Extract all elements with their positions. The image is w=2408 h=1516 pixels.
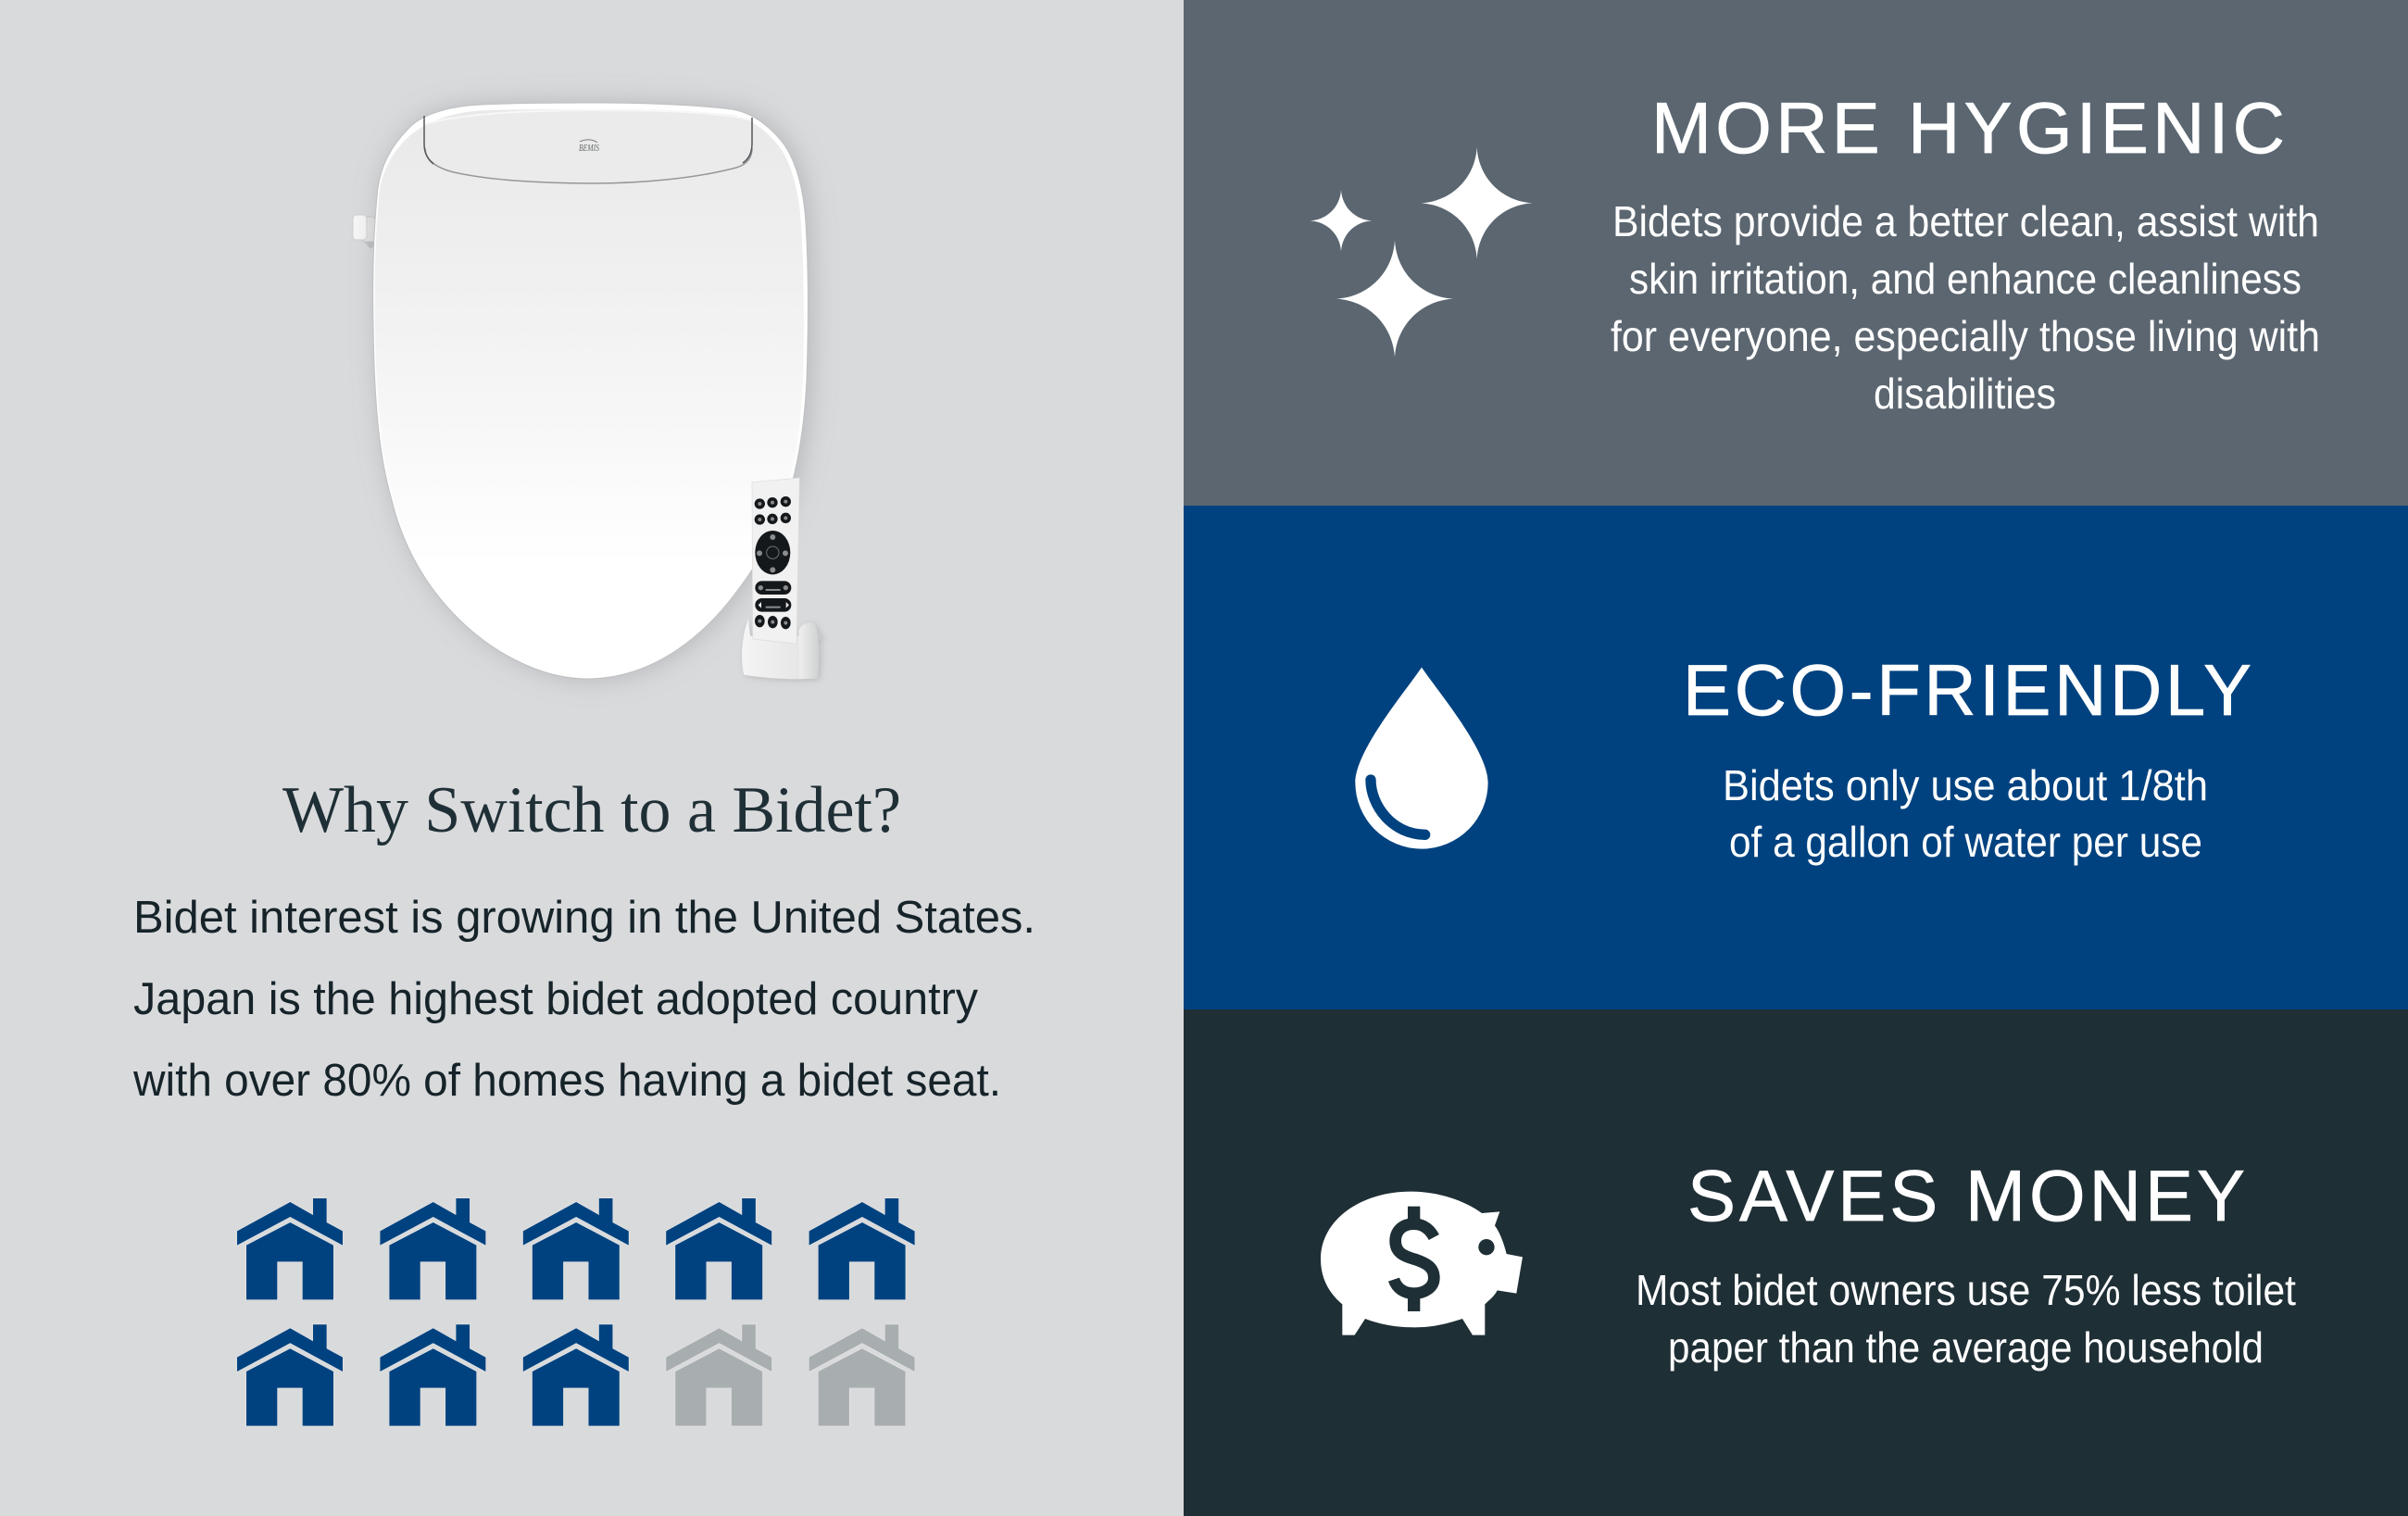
- seat lid: [424, 110, 752, 183]
- brand mark: BEMIS: [579, 144, 599, 154]
- remote buttons: [755, 496, 791, 629]
- heading: saves money: SAVES MONEY: [1687, 1155, 2245, 1236]
- text: hygienic description: Bidets provide a better clean, assist with: [1612, 197, 2319, 245]
- panel: more hygienic: [1184, 0, 2408, 506]
- text: hygienic description: skin irritation, and enhance cleanliness: [1629, 255, 2301, 303]
- heading: why switch: Why Switch to a Bidet?: [282, 774, 901, 846]
- seat surface: [375, 109, 804, 678]
- panel: eco-friendly: [1184, 506, 2408, 1009]
- icon: piggy bank: [1321, 1192, 1523, 1335]
- text block: bidet interest: with over 80% of homes having a bidet seat.: [132, 1056, 1001, 1106]
- text block: bidet interest: [132, 893, 1035, 1106]
- icon: sparkles: [1311, 147, 1533, 357]
- text: saves money description: [1636, 1266, 2296, 1372]
- panel: saves money: [1184, 1009, 2408, 1516]
- heading: more hygienic: MORE HYGIENIC: [1651, 87, 2285, 169]
- text block: bidet interest: Bidet interest is growing in the United States.: [133, 893, 1035, 943]
- image: remote control in cradle: [742, 478, 821, 679]
- text: saves money description: Most bidet owners use 75% less toilet: [1636, 1266, 2296, 1314]
- cradle: [742, 619, 821, 679]
- text: eco description: of a gallon of water per use: [1729, 818, 2202, 866]
- icon: water drop: [1355, 668, 1488, 849]
- house row 1: [237, 1198, 915, 1299]
- house row 2 grey: [666, 1324, 915, 1426]
- remote body: [752, 478, 799, 644]
- heading: eco-friendly: ECO-FRIENDLY: [1683, 649, 2251, 731]
- text block: bidet interest: Japan is the highest bidet adopted country: [133, 974, 978, 1024]
- image: bidet seat product: [353, 103, 808, 679]
- text: hygienic description: [1611, 197, 2320, 418]
- brand mark: [579, 140, 599, 154]
- nozzle connector: [353, 215, 375, 248]
- chart: 8 of 10 homes pictogram: [237, 1198, 915, 1426]
- panel: left background: [0, 0, 1184, 1516]
- text: eco description: [1723, 761, 2208, 866]
- text: saves money description: paper than the average household: [1668, 1323, 2264, 1372]
- text: eco description: Bidets only use about 1/8th: [1723, 761, 2208, 809]
- house row 2 filled: [237, 1324, 629, 1426]
- text: hygienic description: disabilities: [1874, 370, 2056, 418]
- text: hygienic description: for everyone, especially those living with: [1611, 312, 2320, 360]
- seat body: [373, 103, 808, 679]
